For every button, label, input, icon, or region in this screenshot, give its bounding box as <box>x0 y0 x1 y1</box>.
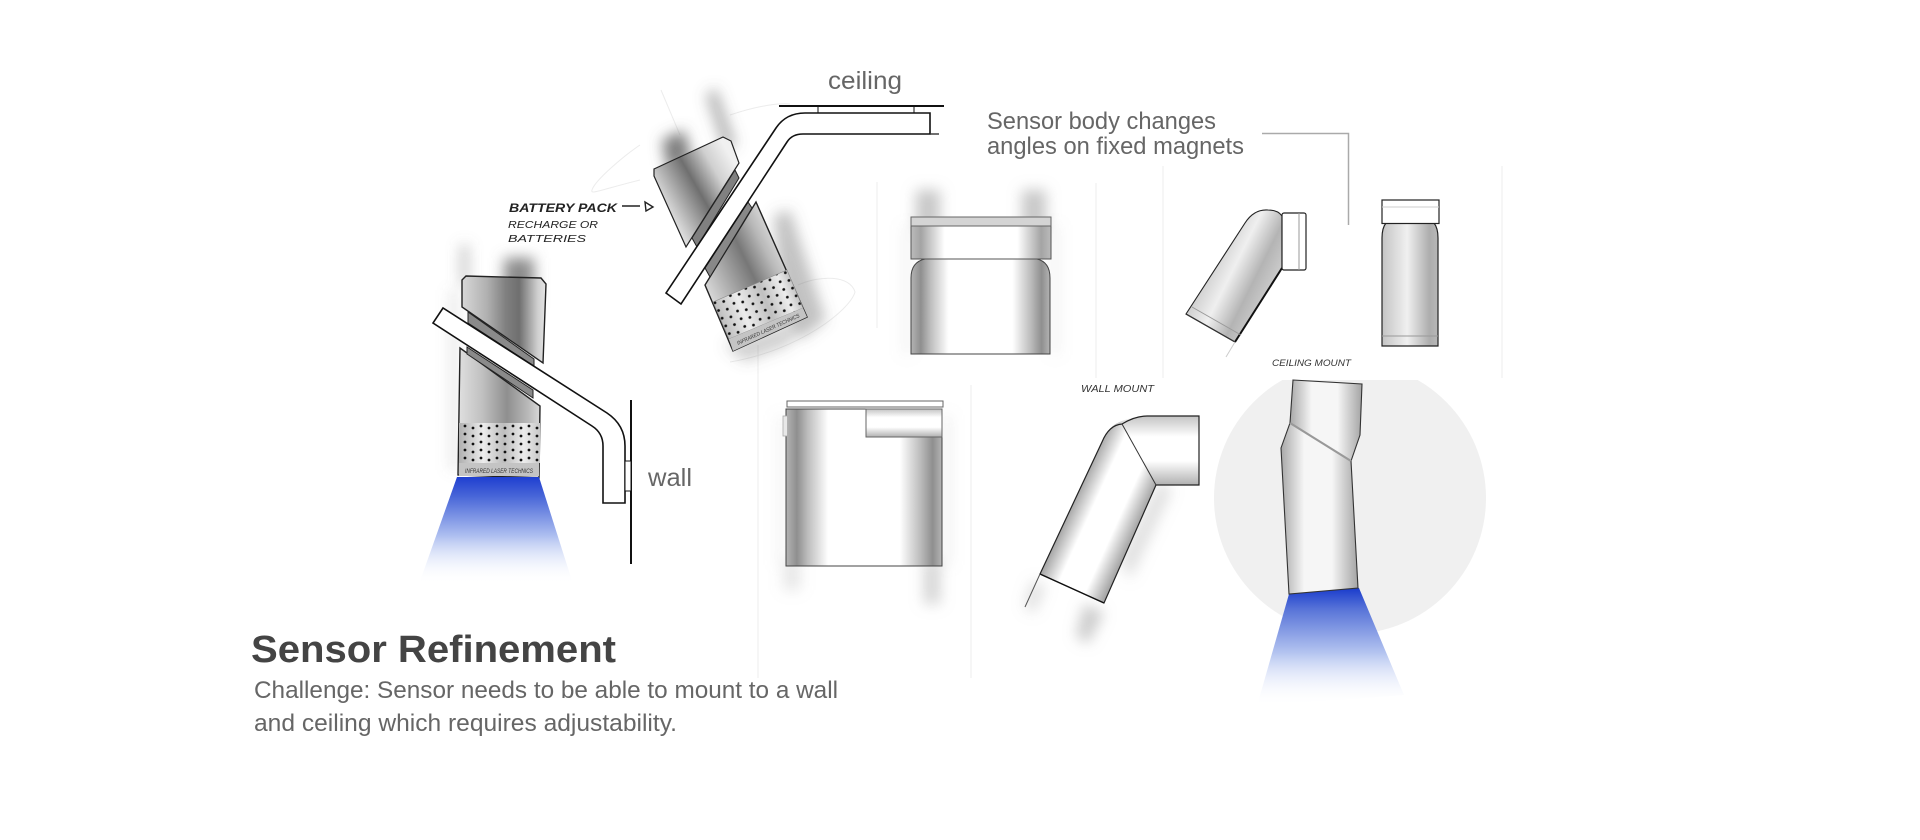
faint construction lines <box>592 90 1502 678</box>
mount arm <box>433 308 625 503</box>
perforated mesh: INFRARED LASER TECHNICS <box>736 313 801 347</box>
label: wall mount: WALL MOUNT <box>1081 384 1155 395</box>
side view: straight sensor <box>1382 200 1439 346</box>
perforated mesh <box>713 270 807 351</box>
front view: top sensor <box>904 190 1058 355</box>
challenge text: and ceiling which requires adjustability. <box>254 710 677 737</box>
battery cap <box>462 276 546 363</box>
ceiling mount tube <box>1257 380 1404 706</box>
perforated mesh <box>459 423 540 476</box>
sensor on ceiling mount <box>654 88 944 362</box>
sensor on wall mount <box>419 245 631 584</box>
callout text: sensor body changes: Sensor body changes <box>987 108 1216 135</box>
blue light cone <box>419 477 573 584</box>
backdrop circle <box>1214 362 1486 634</box>
label: ceiling mount: CEILING MOUNT <box>1272 358 1352 369</box>
callout leader line <box>1262 134 1348 225</box>
arm end cap <box>930 133 939 135</box>
label: wall: wall <box>647 464 692 492</box>
smudge shadows <box>662 88 826 362</box>
battery cap <box>654 137 739 247</box>
label: ceiling: ceiling <box>828 67 902 95</box>
handwritten note: battery pack: BATTERY PACK <box>509 201 619 215</box>
callout text: sensor body changes: angles on fixed magnets <box>987 133 1244 160</box>
wall mount elbow <box>1024 416 1199 644</box>
sensor body <box>458 348 540 478</box>
title: Sensor Refinement <box>251 629 616 671</box>
mount arm <box>666 113 930 304</box>
lower connector <box>705 202 752 277</box>
sensor body <box>705 202 807 351</box>
handwritten note: battery pack: RECHARGE OR <box>508 220 598 231</box>
upper connector <box>692 170 739 247</box>
wall line <box>625 400 631 564</box>
upper connector <box>468 312 534 366</box>
side view: angled sensor <box>1186 210 1306 357</box>
handwritten note: battery pack <box>508 201 653 245</box>
lower connector <box>467 347 533 398</box>
handwritten note: battery pack: BATTERIES <box>508 234 586 245</box>
ceiling line and magnet <box>779 106 944 113</box>
challenge text: Challenge: Sensor needs to be able to mount to a wall <box>254 677 838 704</box>
front view: lower sensor <box>778 401 950 604</box>
perforated mesh: INFRARED LASER TECHNICS <box>465 469 533 475</box>
smudge shadows <box>450 245 534 470</box>
